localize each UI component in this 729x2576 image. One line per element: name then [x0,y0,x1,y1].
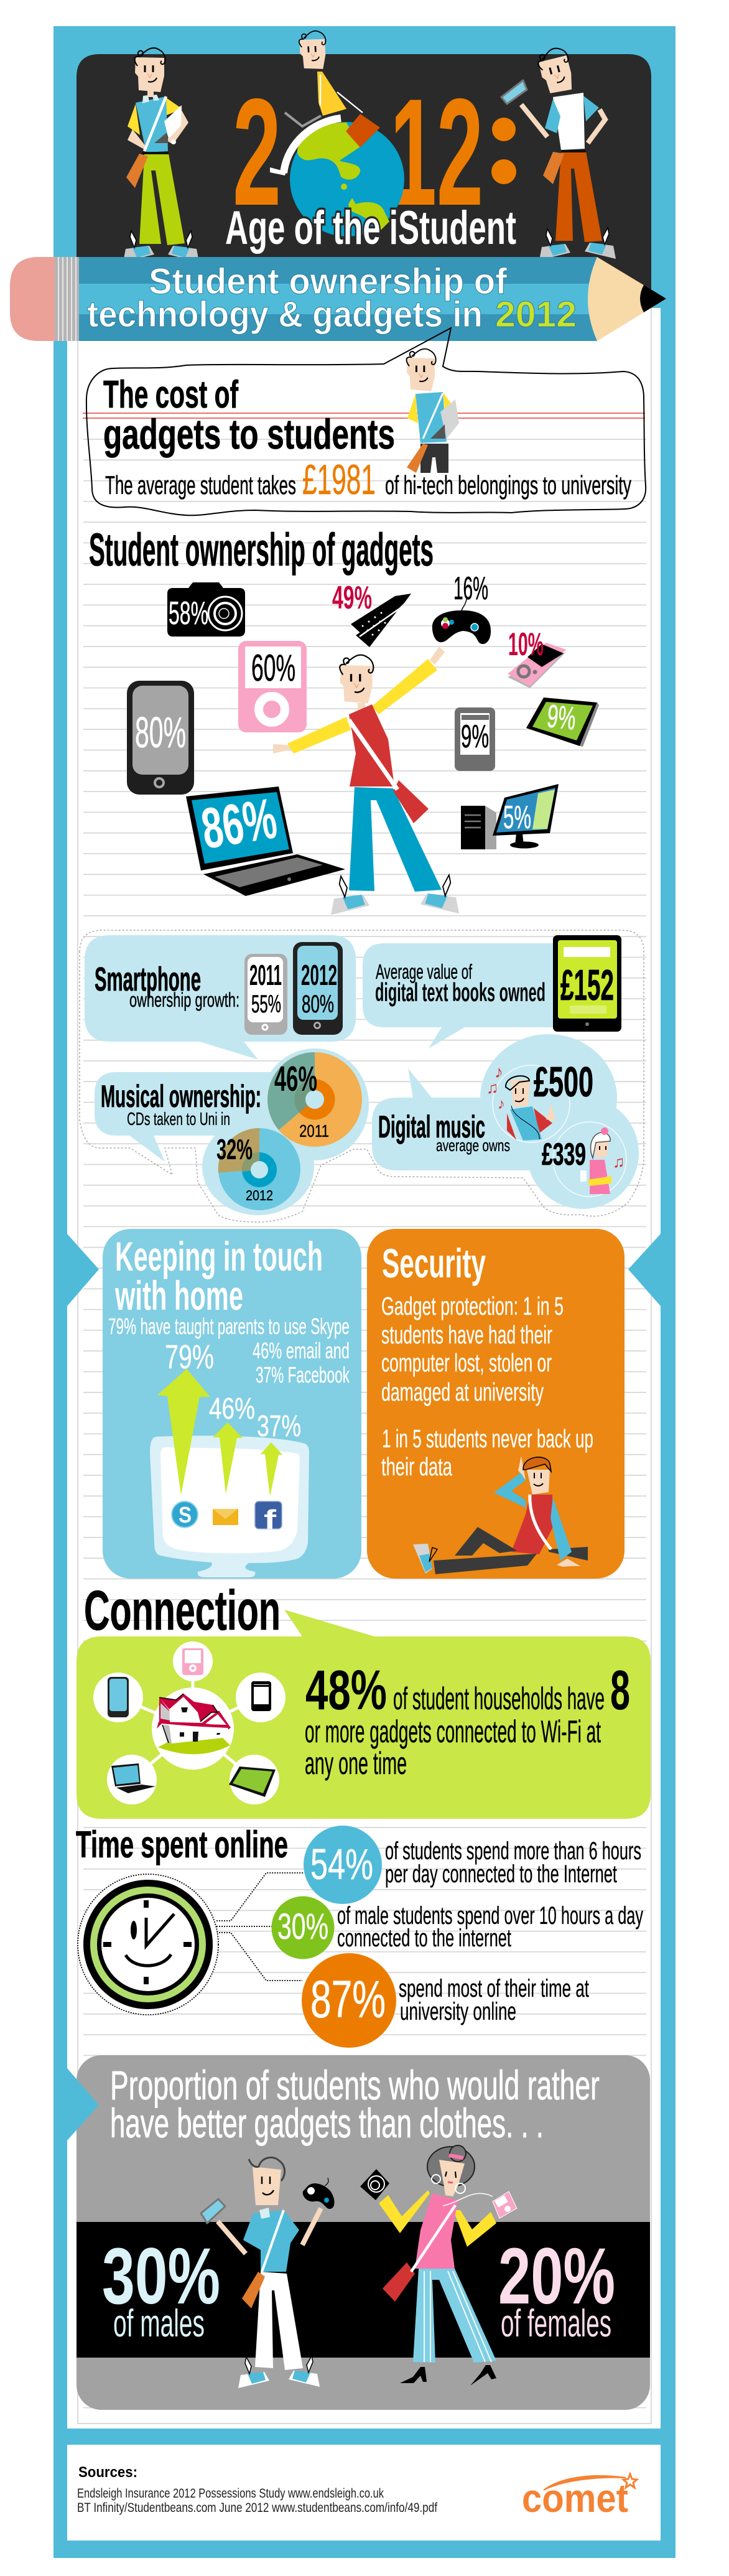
decorative notch over grey panel [67,2068,99,2140]
sources heading: Sources: [78,2464,137,2481]
stat: 30%: 30% [277,1906,328,1947]
stat: 20% of females: of females [501,2302,611,2345]
chart: CD pie 2012 [216,1128,300,1210]
icon: smiling clock [78,1874,218,2015]
stat line: £1981 [302,456,376,503]
banner: pencil [10,257,666,341]
body text: Gadget protection: 1 in 5 [381,1292,564,1320]
heading: Time spent online [76,1824,288,1865]
icon: ebook reader £152: £152 [560,961,614,1009]
callout: digital text books [363,935,621,1048]
stat: 54%: 54% [310,1840,373,1888]
heading: gadgets to students: gadgets to students [103,411,395,458]
icon: phone 2011: 2011 [249,959,282,991]
character: girl with headphones: ♫ [613,1152,625,1171]
stat: 87% [302,1953,589,2048]
callout: digital music: average owns [436,1136,510,1155]
body text: their data [381,1452,452,1481]
body text: 1 in 5 students never back up [382,1424,593,1453]
subtitle line 2: technology & gadgets in [87,294,483,335]
icon: tablet [229,1766,276,1797]
stat: 48% households: any one time [305,1746,407,1781]
stat: 48% households [305,1659,630,1781]
panel: gadgets vs clothes [77,2055,650,2410]
eraser [10,257,55,341]
body text: 46% email and [253,1338,350,1363]
icon: camera 58% [167,582,245,637]
icon: camera 58%: 58% [169,595,208,632]
icon: skype [172,1501,198,1528]
stat: 30%: connected to the internet [337,1925,511,1952]
icon: tablet 9%: 9% [546,698,578,737]
speech bubble outline [86,328,646,515]
callout: musical ownership: Musical ownership: [101,1079,261,1114]
subtitle line 2: 2012 [495,294,577,335]
character: male student with gadgets [201,2157,335,2388]
panel: connection [77,1610,651,1819]
panel: security [367,1229,625,1579]
stat: 87%: 87% [310,1970,386,2028]
icon: ipod [182,1648,203,1675]
arrow percentages: 79% [165,1338,214,1376]
character: female student with gadgets [360,2145,517,2386]
dark header background [77,54,651,292]
stat: 48% households: 8 [610,1659,630,1722]
year 2012: 2 [233,67,281,237]
logo: comet: comet [522,2476,628,2521]
icon: laptop [111,1763,156,1793]
heading [114,1233,323,1318]
icon: phone 2012: 80% [302,991,334,1018]
icon: facebook: f [264,1505,276,1535]
chart: CD pie 2012: 2012 [246,1187,273,1203]
callout: smartphone ownership growth: Smartphone [95,961,201,998]
red margin lines [83,413,645,418]
panel: sources footer [67,2445,661,2541]
icon: e-reader 9%: 9% [461,719,489,755]
icon: game controller 16%: 16% [453,571,488,607]
year 2012: 0 [320,127,373,231]
panel: keeping in touch with home [103,1229,361,1579]
stat: 30% of males: of males [113,2302,205,2345]
callout: digital text books: digital text books owned [375,978,546,1007]
icon: phone 2012 [293,942,343,1035]
character: boy with headphones [486,1062,555,1141]
character: boy with headphones: ♫ [486,1078,499,1097]
icon: mobile phone 49%: 49% [332,580,372,616]
callout: musical ownership: CDs taken to Uni in [127,1109,230,1129]
source lines: Endsleigh Insurance 2012 Possessions Study www.endsleigh.co.uk [77,2486,384,2501]
icon: mobile [251,1681,271,1711]
stat: 20% of females [498,2232,615,2345]
icon: house [157,1694,231,1754]
arrow percentages [165,1338,301,1443]
heading: connection: Connection [84,1580,281,1642]
callout: cost of gadgets [83,328,646,515]
arrow percentages: 37% [257,1410,301,1443]
stat line: The average student takes [105,470,296,500]
arrows [157,1369,282,1496]
heading: the cost of: The cost of [103,373,238,416]
diagram: connected devices [93,1641,286,1804]
chart: CD pie 2012: 32% [216,1133,253,1165]
body text: students have had their [381,1320,552,1349]
body text [108,1314,350,1388]
character: student with phone [501,45,616,260]
callout: smartphone ownership growth: ownership growth: [129,989,239,1011]
character: sitting student on globe [270,30,380,175]
icon: desktop computer 5%: 5% [503,800,531,836]
dashed group outline [80,930,644,1222]
icon: smartphone 80%: 80% [135,708,186,757]
black band [77,2222,650,2358]
stat: 48% households: 48% [305,1659,387,1722]
icon: ebook reader £152 [553,935,621,1032]
callout: digital music: Digital music [378,1109,485,1144]
chart: CD pie 2011: 2011 [299,1121,329,1141]
callout: smartphone ownership growth [85,935,356,1060]
stat: 87%: university online [400,1998,516,2025]
chart: CD pie 2011 [267,1052,362,1147]
icon: mp3 player 10% [508,627,566,688]
source lines [77,2486,437,2515]
icon: ipod 60%: 60% [251,647,295,689]
year 2012 [233,67,516,237]
body text: 37% Facebook [256,1362,350,1388]
price £339: £339 [542,1137,586,1172]
icon: monitor [150,1435,309,1577]
stat line [105,456,631,503]
price £500: £500 [534,1058,593,1106]
icon: skype: S [179,1502,192,1528]
icon: phone 2011 [244,954,287,1035]
character: central student reaching out [273,646,459,915]
icon: e-reader 9% [455,707,495,771]
icon: facebook [255,1501,282,1535]
icon: laptop 86% [186,786,345,896]
character: boy with headphones: ♪ [495,1062,503,1081]
stat: 87%: spend most of their time at [399,1975,589,2002]
icon: smartphone [108,1677,129,1717]
character: student with book [123,48,199,262]
icon: mobile phone 49% [332,580,411,647]
panel: header [77,30,651,292]
icon: phone 2012: 2012 [301,959,337,991]
icon: game controller 16% [432,571,491,644]
stat: 30% of males: 30% [102,2232,220,2321]
title: Age of the iStudent: Age of the iStudent [225,202,516,254]
dotted connectors [216,1873,304,1981]
year 2012: 12 [390,67,483,237]
arrow percentages: 46% [209,1393,255,1426]
callout: digital text books: Average value of [376,960,473,983]
stat: 30% [271,1897,643,1959]
icon: phone 2011: 55% [251,991,281,1018]
body text: 79% have taught parents to use Skype [108,1314,350,1339]
pencil body [79,257,597,341]
icon: ipod 60% [238,641,307,732]
ferrule [55,257,80,341]
icon: email [213,1509,238,1525]
heading [110,2062,600,2146]
callout: musical ownership [95,1048,369,1215]
decorative side notches [67,1234,661,1306]
callout: digital music [372,1034,639,1209]
source lines: BT Infinity/Studentbeans.com June 2012 www.studentbeans.com/info/49.pdf [77,2501,437,2515]
character: boy with headphones: ♪ [498,1096,505,1113]
panel: time spent online [76,1824,643,2048]
heading: Security [382,1240,486,1286]
body text [381,1292,593,1481]
stat: 54% [304,1826,641,1904]
character: girl with headphones [580,1127,625,1194]
chart: gadget ownership pictogram [127,571,599,915]
icon: laptop 86%: 86% [197,786,281,861]
subtitle line 1: Student ownership of [149,261,508,302]
character: student in bubble [406,349,459,473]
character: seated student [413,1456,588,1574]
heading: Keeping in touch [115,1233,323,1279]
notebook paper [67,308,661,2429]
stat: 30% of males [102,2232,220,2345]
chart: CD pie 2011: 46% [274,1059,317,1099]
heading: with home [114,1272,243,1318]
icon: desktop computer 5% [461,784,559,849]
body text: computer lost, stolen or [381,1348,552,1377]
panel: gadget stats group [80,930,644,1222]
body text: damaged at university [381,1378,544,1406]
heading: student ownership of gadgets: Student ownership of gadgets [89,524,434,576]
icon: globe [290,122,404,236]
icon: tablet 9% [526,698,599,747]
icon: smartphone 80% [127,681,194,795]
icon: mp3 player 10%: 10% [508,627,544,663]
stat: 20% of females: 20% [498,2232,615,2321]
pencil tip [588,257,666,341]
